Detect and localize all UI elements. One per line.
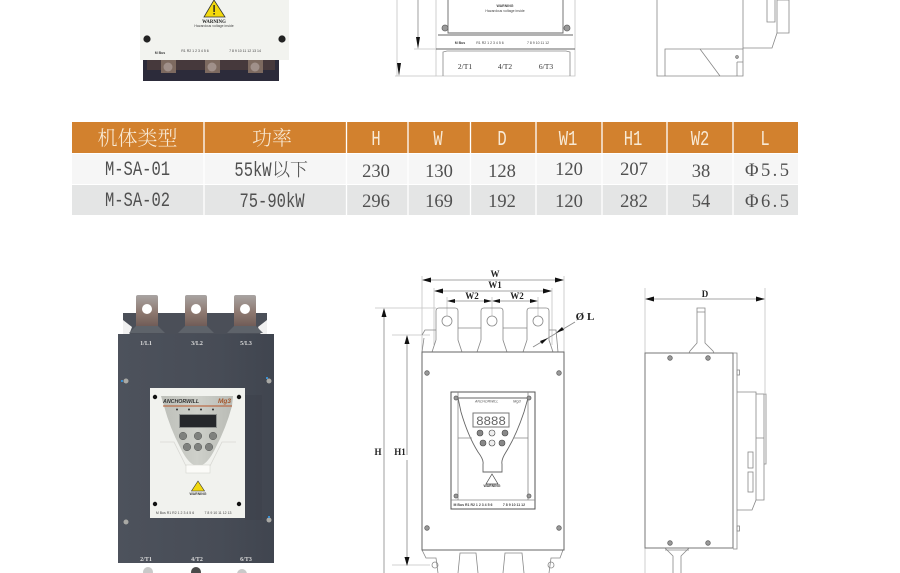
table row M-SA-02: Φ6.5 (745, 192, 789, 212)
table header row: L (760, 128, 770, 152)
top device photo (cropped): Hazardous voltage inside (194, 24, 234, 28)
table row M-SA-02: 120 (555, 192, 583, 212)
body outline (422, 352, 564, 550)
panel outline: ANCHORWILL (474, 400, 498, 404)
dimension labels: W1 (488, 280, 502, 290)
table row M-SA-02: 75-90kW (239, 191, 305, 214)
table row M-SA-02: 54 (692, 192, 710, 212)
dimension lines (375, 276, 575, 573)
top front view drawing (cropped) (395, 0, 575, 76)
top device photo (cropped) (140, 0, 289, 81)
dimension labels: W2 (465, 291, 479, 301)
table row M-SA-02 (72, 185, 798, 215)
table row M-SA-01 (72, 154, 798, 184)
panel outline (451, 392, 535, 509)
table row M-SA-01: 120 (555, 160, 583, 180)
control panel: ANCHORWILL (162, 399, 199, 405)
table row M-SA-01: 以下 (272, 156, 308, 182)
table row M-SA-01: 55kW (234, 160, 272, 183)
table row M-SA-02: 282 (620, 192, 648, 212)
table row M-SA-01: 38 (692, 162, 710, 182)
table header row (72, 122, 798, 153)
dimensions table (72, 122, 798, 215)
table row M-SA-01: 207 (620, 160, 648, 180)
table row M-SA-01: Φ5.5 (745, 161, 789, 181)
dimension labels: W2 (510, 291, 524, 301)
copper terminals (129, 295, 263, 333)
top front view drawing (cropped): WARNING (497, 4, 514, 8)
top front view drawing (cropped): 6/T3 (539, 62, 553, 71)
top front view drawing (cropped): M Bus (455, 41, 465, 45)
top front view drawing (cropped): 7 8 9 10 11 12 (527, 41, 549, 45)
control panel: Mg3 (218, 398, 231, 405)
body labels (140, 341, 252, 563)
dimension labels: W (490, 269, 500, 279)
body labels: 3/L2 (191, 341, 203, 347)
table header row: 机体类型 (98, 122, 178, 151)
control panel: 7 8 9 10 11 12 13 (204, 511, 232, 515)
bottom device photo (118, 295, 274, 573)
dimension labels: H1 (394, 447, 406, 457)
table header row: W (433, 128, 443, 152)
table header row: D (497, 128, 507, 152)
control panel (150, 388, 245, 518)
table header row: H (371, 128, 381, 152)
top front view drawing (cropped): 2/T1 (458, 62, 472, 71)
back flange (123, 313, 267, 335)
top device photo (cropped): M Bus (155, 51, 165, 55)
bottom terminal stubs (143, 567, 247, 573)
table header row: W1 (559, 128, 577, 152)
bottom front dimension drawing (374, 269, 594, 573)
top device photo (cropped): R1 R2 1 2 3 4 5 6 (181, 49, 209, 53)
top front view drawing (cropped): R1 R2 1 2 3 4 5 6 (476, 41, 504, 45)
dimension labels: Ø L (576, 311, 594, 323)
top device photo (cropped): 7 8 9 10 11 12 13 14 (229, 49, 261, 53)
panel outline: M Bus R1 R2 1 2 3 4 5 6 (454, 503, 492, 507)
table row M-SA-01: 128 (488, 162, 516, 182)
table header row: H1 (624, 128, 642, 152)
control panel: WARNING (190, 492, 207, 496)
table row M-SA-01: 230 (362, 162, 390, 182)
table row M-SA-01: 130 (425, 162, 453, 182)
body labels: 2/T1 (140, 557, 152, 563)
top side view drawing (cropped) (657, 0, 789, 76)
dimension labels (374, 269, 594, 457)
body labels: 1/L1 (140, 341, 152, 347)
top front view drawing (cropped): 4/T2 (498, 62, 512, 71)
body (118, 334, 274, 563)
panel outline: 8888 (476, 414, 506, 429)
body labels: 4/T2 (191, 557, 203, 563)
panel outline: Mg3 (513, 398, 522, 404)
table row M-SA-02: M-SA-02 (105, 190, 170, 213)
control panel: M Bus R1 R2 1 2 3 4 5 6 (156, 511, 194, 515)
table row M-SA-01: M-SA-01 (105, 159, 170, 182)
table row M-SA-02: 296 (362, 192, 390, 212)
body labels: 5/L3 (240, 341, 252, 347)
panel outline: 7 8 9 10 11 12 (503, 503, 525, 507)
terminals outline (422, 308, 563, 573)
bottom side dimension drawing: D (702, 289, 709, 299)
table row M-SA-02: 169 (425, 192, 453, 212)
panel outline: WARNING (484, 484, 501, 488)
dimension labels: H (374, 447, 382, 457)
bottom side dimension drawing (645, 288, 766, 573)
body labels: 6/T3 (240, 557, 252, 563)
table row M-SA-02: 192 (488, 192, 516, 212)
table header row: 功率 (252, 122, 292, 151)
top front view drawing (cropped): Hazardous voltage inside (485, 9, 525, 13)
top device photo (cropped): WARNING (202, 20, 226, 25)
table header row: W2 (691, 128, 709, 152)
